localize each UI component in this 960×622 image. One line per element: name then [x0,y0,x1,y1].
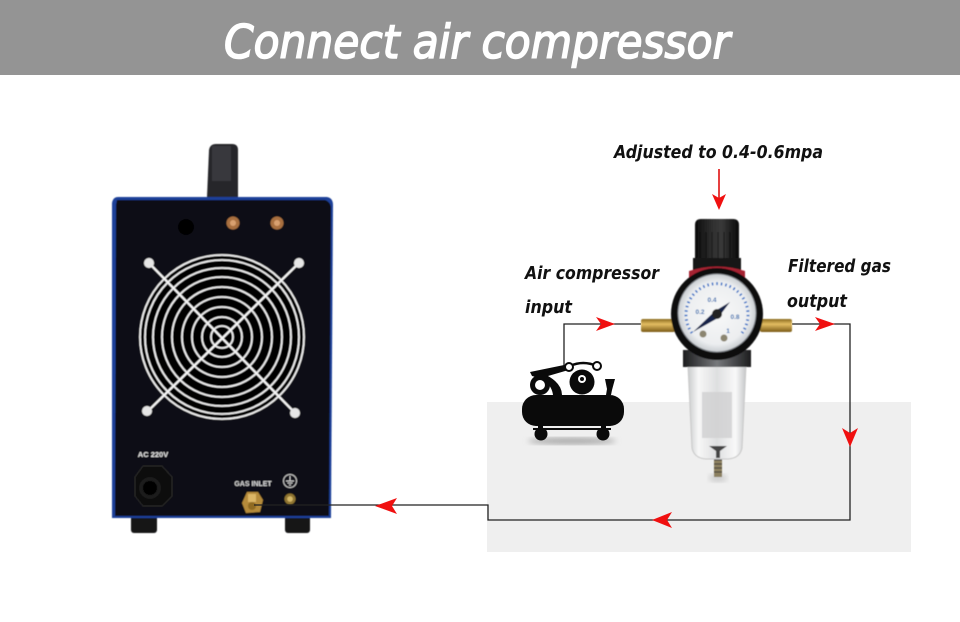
label: compressor input: Air compressor [523,263,660,284]
label: filtered gas output [787,256,891,312]
cable gland [135,466,172,506]
air line path [254,324,850,520]
arrow: to gas inlet [375,498,397,514]
power label: AC 220V [138,450,168,459]
feet [131,514,310,533]
adjustment knob [689,219,745,280]
pressure gauge: 1 [726,328,730,335]
title: Connect air compressor [224,15,733,69]
brass fittings [641,319,675,332]
filter bowl [688,366,746,459]
label: adjusted pressure: Adjusted to 0.4-0.6mpa [612,142,823,163]
welder machine rear view [112,144,333,533]
title banner [0,0,960,75]
machine body [112,197,333,518]
drain valve [709,452,727,482]
arrow: output [815,317,835,331]
gas inlet label: GAS INLET [234,481,272,488]
label: filtered gas output: output [787,291,848,312]
gas inlet fitting [242,492,263,513]
pressure gauge: 0.8 [730,314,740,321]
pressure gauge [671,268,763,360]
neck [683,350,751,367]
hole [178,219,194,235]
arrow: bottom line [652,512,672,528]
pressure gauge: 0.2 [695,309,705,316]
air compressor icon [522,362,624,444]
handle [207,144,238,197]
grey floor panel [487,402,911,552]
arrow: input [596,317,615,331]
copper bolts [226,216,284,230]
arrow: down right side [842,428,858,447]
arrow: adjust knob [712,169,726,210]
ground bolt [284,494,296,504]
pressure gauge: 0.4 [707,297,717,304]
ground symbol [284,474,296,488]
air filter regulator [641,219,792,482]
label: compressor input: input [525,297,573,318]
label: filtered gas output: Filtered gas [788,256,891,277]
fan guard [140,255,304,419]
label: compressor input [523,263,660,318]
